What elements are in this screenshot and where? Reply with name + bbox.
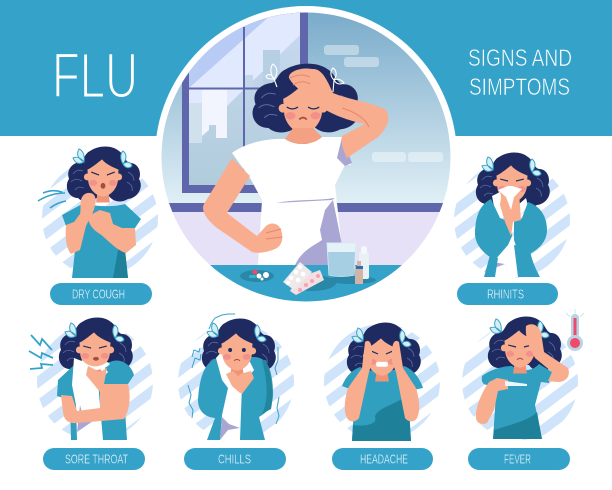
breath lines icon [38,191,66,208]
woman: neck [285,128,322,144]
pain bolts icon [29,335,53,369]
woman: hair [253,64,359,132]
striped circle [324,324,440,440]
panel: dry cough [38,146,158,305]
woman: head [278,88,327,129]
bows [352,328,411,347]
shirt [482,364,552,439]
bows [73,149,132,168]
window [182,5,308,193]
hair [202,318,276,374]
striped circle [178,324,294,440]
header banner [0,0,612,136]
panel: sore throat [29,318,153,470]
label pill [43,448,145,470]
hand thermometer [505,381,527,386]
room background [160,10,452,267]
head [493,163,531,208]
panel: headache [324,322,440,470]
striped circle [42,160,158,276]
label pill [50,283,152,305]
shirt [490,235,521,277]
head [84,157,122,202]
crossed hands [226,371,254,394]
label pill [332,448,433,470]
clouds [324,45,443,162]
hair [67,146,141,202]
head [363,336,401,381]
woman: raised arm and hand [289,69,388,158]
panel: fever [462,309,584,470]
lower jacket [484,245,540,277]
striped circle [37,324,153,440]
head [218,331,256,376]
shirt [216,350,254,440]
table [210,265,402,302]
hair [347,322,421,378]
glass of water [327,243,376,284]
label text: CHILLS [218,452,251,466]
panel: rhinits [454,152,570,305]
heading: signs and simptoms: SIMPTOMS [469,74,570,101]
head [501,328,539,373]
shirt [342,366,423,441]
jacket sleeves [475,199,512,260]
heading: signs and simptoms [468,45,572,101]
hair [476,152,550,208]
central circle: sick woman in a room [155,5,457,308]
label text: FEVER [504,452,531,466]
arms [66,193,96,254]
torso [62,203,141,278]
arms and hands on temples [345,341,419,421]
panel: chills [178,314,294,470]
striped circle [454,162,570,278]
bows [207,323,266,342]
hair [59,318,133,373]
scarf collar [80,360,110,370]
hair [488,316,562,372]
woman: arm on hip [203,158,282,253]
heading: signs and simptoms: SIGNS AND [468,45,572,72]
nasal spray bottles [355,246,369,284]
woman: bows [266,64,344,92]
collar [492,192,528,222]
label text: HEADACHE [360,452,408,466]
woman: shirt [232,137,352,265]
title: FLU: FLU [52,40,138,112]
label text: DRY COUGH [72,288,125,302]
bows [490,319,549,338]
spilled pills [240,270,274,282]
label text: RHINITS [487,288,524,302]
arm holding thermometer [476,378,508,424]
label text: SORE THROAT [65,452,128,466]
thermometer icon [566,309,584,351]
raised arm to forehead [526,324,569,382]
bows [482,157,541,176]
label pill [457,283,558,305]
label pill [468,448,570,470]
jacket [198,357,273,440]
shiver lines icon [188,314,279,424]
arms [61,366,130,423]
shirt [57,361,134,440]
label pill [184,448,286,470]
head [76,330,114,375]
bows [65,323,124,342]
striped circle [462,324,578,440]
blister packs [283,262,336,295]
hands and tissue [500,186,521,236]
